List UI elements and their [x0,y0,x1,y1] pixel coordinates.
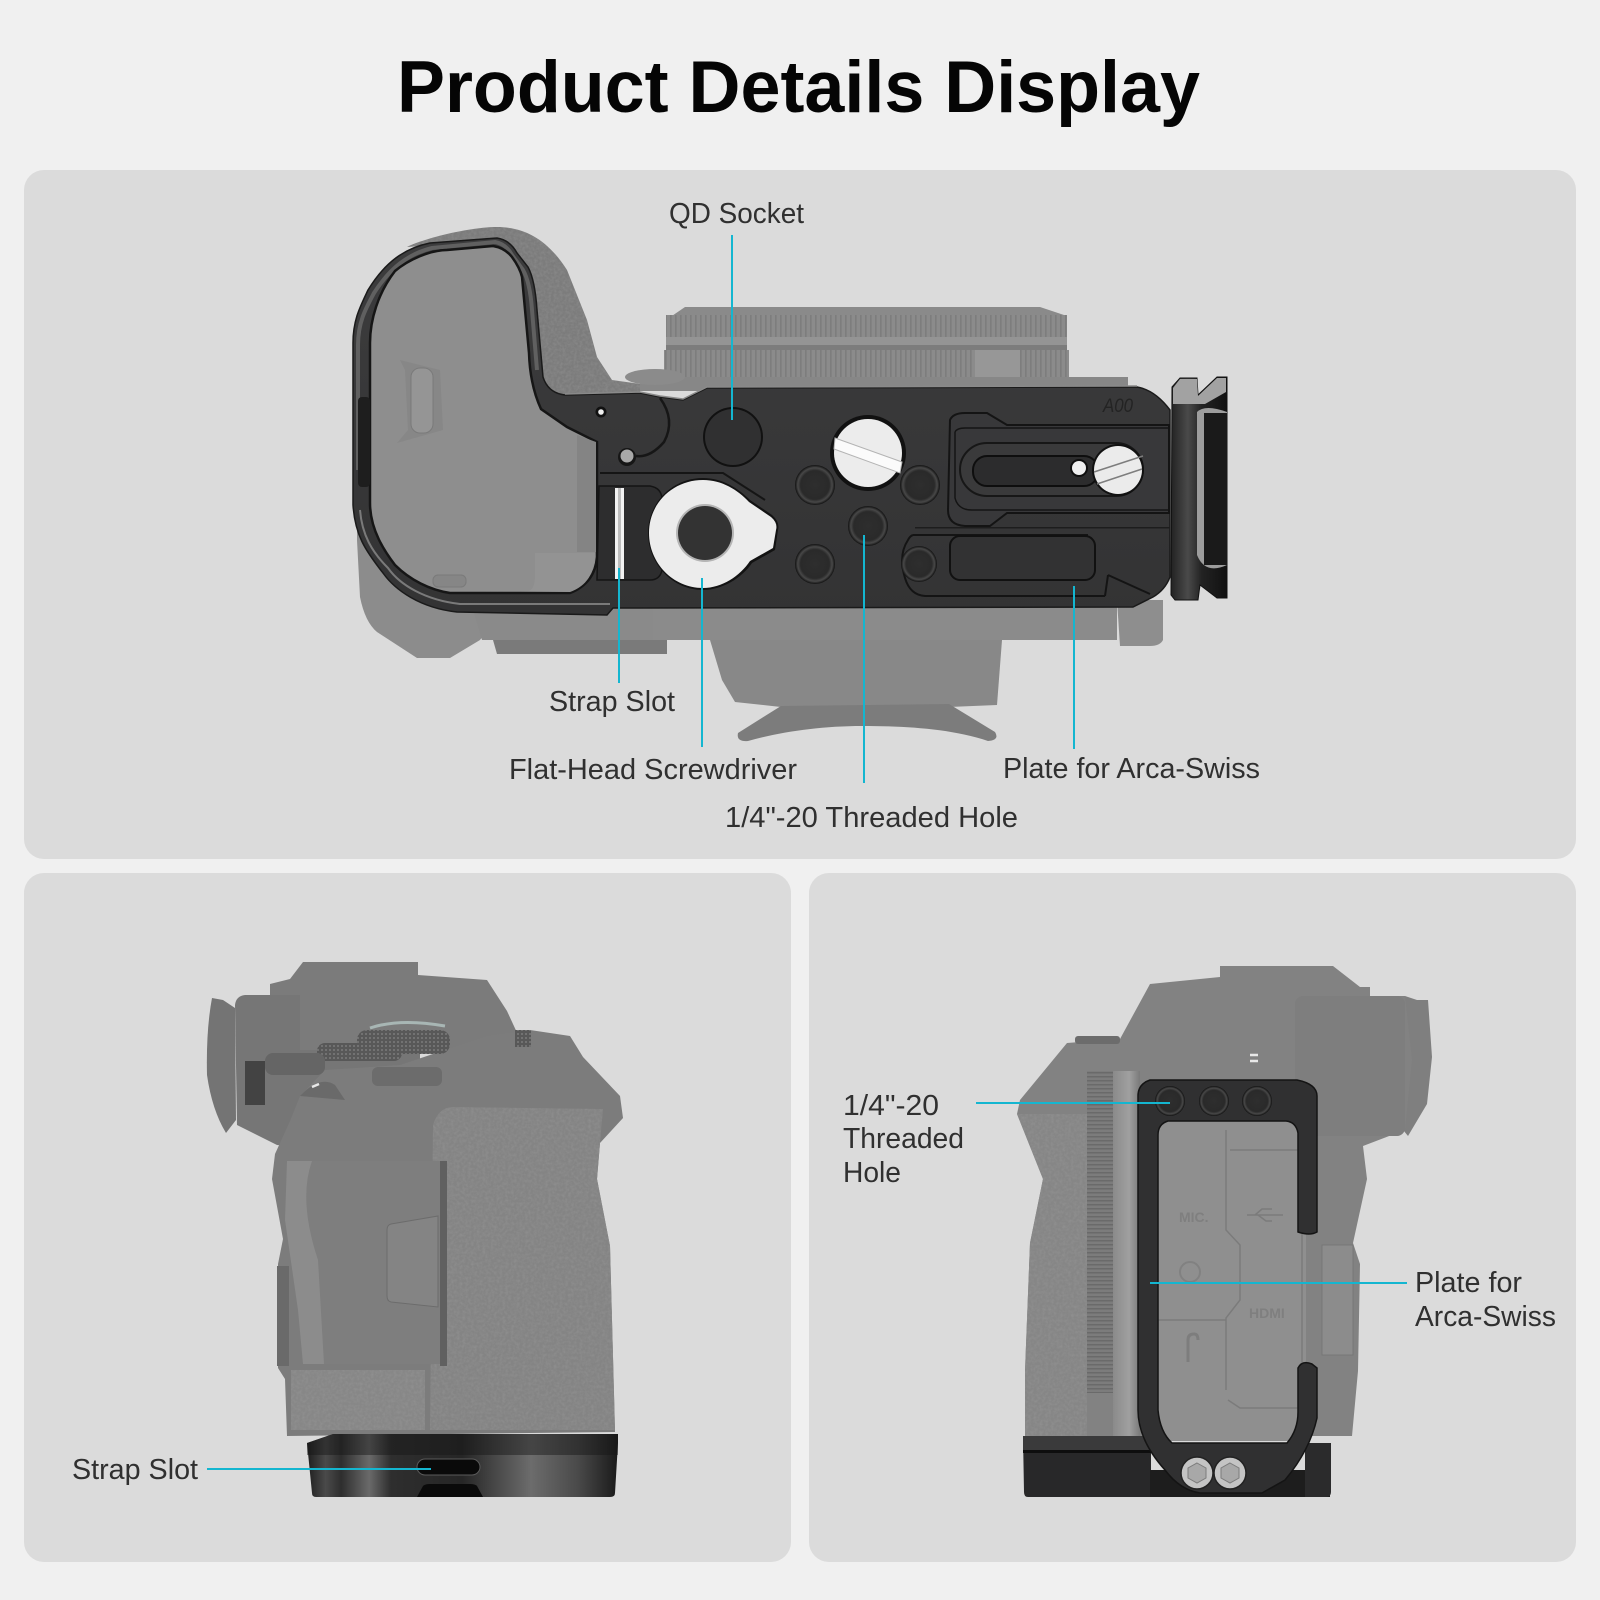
plate top edge highlight [565,386,1137,399]
upper mounting slide [948,413,1169,526]
strap slot white bar [615,488,624,579]
panel background [809,873,1576,1562]
bracket frame [1138,1080,1317,1493]
eyecup [207,998,236,1133]
plate body [353,238,1170,615]
dial LCD markings [370,1022,445,1028]
grip lower body [357,520,620,658]
QD socket [703,407,763,467]
side plate [1171,377,1227,600]
hex screw right [1214,1457,1246,1489]
door latch emboss [397,360,443,443]
door dark strip [440,1161,447,1366]
control rail [493,640,667,654]
camera body silhouette, top view [357,227,1163,741]
door window [1158,1121,1306,1441]
USB symbol [1247,1209,1283,1221]
panel background [24,873,791,1562]
panel: side view with strap slot [24,873,791,1562]
hex screw left [1181,1457,1213,1489]
door right shaded area [577,435,596,552]
hinge knob [618,448,636,466]
base plate [1023,1436,1331,1497]
label: plate for Arca-Swiss: Plate for Arca-Swiss [1003,753,1260,785]
body below plate [653,600,1117,640]
top right dial [515,1030,531,1047]
lower body band [470,600,660,640]
groove [600,473,765,500]
base upper band [307,1434,618,1455]
leader line: threaded hole [976,1102,1170,1104]
label: strap slot: Strap Slot [549,686,675,718]
leather grip [430,1107,615,1430]
eyecup [738,704,996,741]
eyepiece dark knob [245,1061,265,1105]
panel: top view of camera cage [24,170,1576,859]
left port column [277,1266,289,1366]
body silhouette [1017,966,1412,1436]
frame outer band [358,242,537,470]
leader line: strap slot [618,568,620,683]
hinge arc [636,398,669,456]
leader line: strap slot [207,1468,431,1470]
side door [285,1161,440,1364]
panel background [24,170,1576,859]
leader line: Arca plate [1150,1282,1407,1284]
leather grip [407,227,640,400]
shoulder buttons [1075,1036,1120,1044]
label: plate for Arca-Swiss: Arca-Swiss [1415,1301,1556,1333]
door highlight [285,1161,324,1364]
eyepiece block [1295,996,1405,1136]
label: flat-head screwdriver: Flat-Head Screwdriver [509,754,797,786]
lower opening [417,1484,483,1497]
port door lines [1158,1130,1302,1410]
shoulder linkage [265,1053,325,1075]
viewfinder hump [270,962,525,1050]
shutter button [625,369,685,385]
port label HDMI: HDMI [1249,1305,1285,1321]
threaded holes [1155,1086,1272,1116]
top front ridge [300,1082,345,1100]
door lower step [470,553,595,592]
leader line: QD socket [731,235,733,420]
battery door [370,246,597,593]
screwdriver washer [648,478,778,590]
leader line: threaded hole [863,535,865,783]
leader line: Arca plate [1073,586,1075,749]
threaded holes [795,465,940,584]
status light [312,1084,319,1087]
mount lip [1113,1071,1140,1436]
headphone symbol [1180,1262,1200,1282]
label: strap slot: Strap Slot [72,1454,198,1486]
frame highlight [360,510,610,604]
panel: side view with ports and threaded holes [809,873,1576,1562]
main dial [317,1043,402,1061]
label: threaded hole: Threaded [843,1123,964,1155]
vertical L-bracket [1138,1080,1317,1493]
door vent [433,575,466,587]
top button bar [372,1067,442,1086]
remote port symbol [1188,1334,1198,1362]
main body [272,1030,623,1436]
leader line: flat-head screwdriver [701,578,703,747]
label: threaded hole: Hole [843,1157,901,1189]
label: threaded hole: 1/4"-20 [843,1090,939,1122]
port label MIC: MIC. [1179,1209,1209,1225]
label: threaded hole [843,1090,964,1189]
lower lens collar [664,350,1069,377]
cage base plate [307,1434,618,1497]
strap slot recess [597,486,662,580]
viewfinder housing [710,640,1002,707]
door latch oval [411,368,433,433]
large slotted screw [830,415,906,491]
side tab [1322,1245,1353,1355]
lens mount ring [1087,1071,1113,1393]
lens ring [666,307,1067,350]
arm pin [596,406,606,418]
label: threaded hole: 1/4"-20 Threaded Hole [725,802,1018,834]
label: plate for Arca-Swiss: Plate for [1415,1267,1522,1299]
camera body, left side [207,962,623,1436]
label: QD socket: QD Socket [669,198,804,230]
lower Arca plate [901,527,1170,596]
door tab [387,1216,438,1307]
mode marker [1250,1055,1258,1061]
eyepiece [235,995,420,1147]
label: plate for Arca-Swiss [1415,1267,1556,1333]
leather grip [1017,1114,1087,1436]
title: Product Details Display [397,47,1200,128]
lower leather [291,1370,425,1430]
left notch [358,397,370,487]
camera body, right side [1017,966,1432,1436]
model mark: A00 [1102,396,1133,417]
eyecup [1395,996,1432,1136]
strap slot opening [417,1459,480,1475]
rear dial [357,1030,450,1054]
L-bracket plate [353,238,1227,615]
